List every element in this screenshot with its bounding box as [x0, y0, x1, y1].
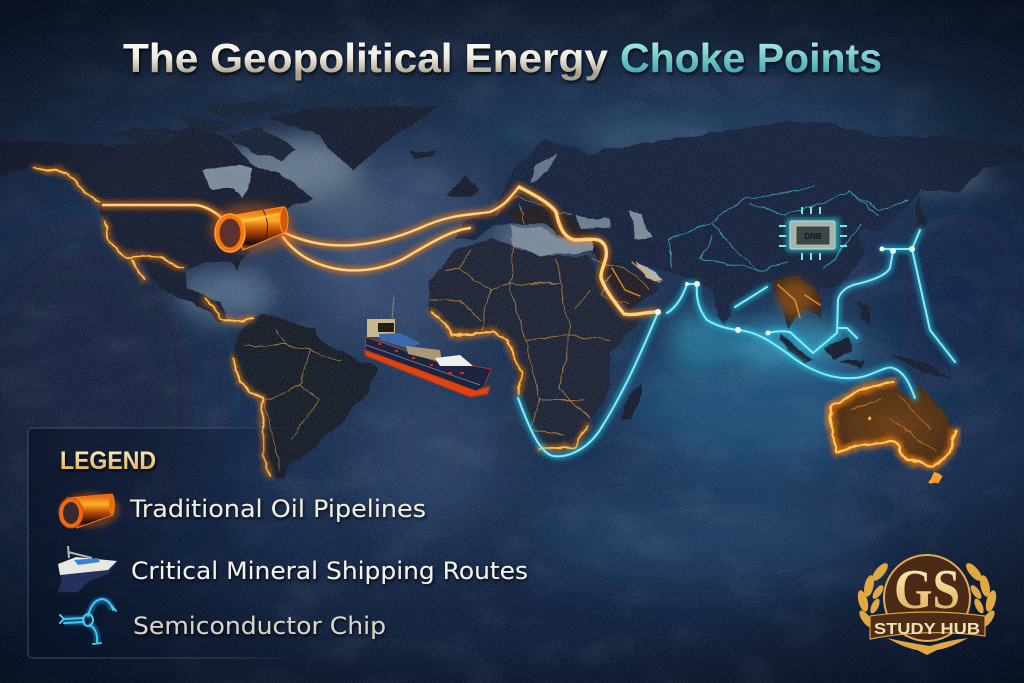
glowing coasts — [34, 168, 955, 484]
legend heading: LEGEND — [60, 447, 156, 475]
land: Madagascar — [621, 383, 642, 420]
glow: Americas coast — [34, 168, 270, 477]
route: upper Atlantic crossing — [283, 187, 519, 245]
glow: Australia coast — [830, 382, 955, 484]
land: Africa — [428, 238, 643, 450]
route nodes — [655, 246, 915, 336]
route: lower Atlantic crossing — [283, 228, 470, 270]
land: Australia — [830, 382, 955, 467]
land: Iceland and UK — [408, 151, 525, 197]
semiconductor shipping routes — [518, 230, 955, 456]
land: North America — [0, 128, 313, 322]
legend item: oil pipelines — [59, 492, 426, 528]
icon: chip on map — [779, 207, 847, 260]
legend item: shipping routes: Critical Mineral Shipping Routes — [131, 557, 528, 585]
title: The Geopolitical Energy — [123, 35, 608, 81]
icon: cargo ship on map — [364, 297, 491, 397]
logo: GS Study Hub badge: STUDY HUB — [874, 621, 980, 638]
land: South America — [233, 313, 377, 480]
land: Europe and Middle East tint — [500, 205, 655, 312]
route: Cape of Good Hope — [518, 315, 657, 456]
land: Arctic islands — [110, 102, 297, 160]
logo: GS Study Hub badge: GS — [894, 559, 960, 621]
legend item: semiconductor chip: Semiconductor Chip — [133, 612, 386, 640]
icon: chip on map: DNB — [804, 232, 822, 241]
panel: legend — [28, 428, 528, 658]
legend item: oil pipelines: Traditional Oil Pipelines — [129, 495, 426, 523]
title: Choke Points — [620, 35, 882, 81]
Asia cyan borders — [668, 185, 910, 270]
land: South-East Asia tint — [772, 276, 820, 325]
land: Europe and Asia — [454, 120, 1024, 330]
legend item: shipping routes — [58, 546, 528, 592]
route: South China Sea to Japan and Pacific — [735, 230, 955, 362]
oil pipeline routes — [103, 187, 657, 315]
land: Indonesia, Philippines, New Guinea and Japan — [778, 195, 952, 378]
country borders — [245, 195, 650, 470]
glow: Africa coast — [433, 313, 587, 449]
land: Greenland — [267, 107, 440, 170]
laurel wreath — [856, 561, 998, 655]
title — [123, 35, 882, 81]
glow: South-East Asia and Arabia lights — [612, 262, 820, 318]
legend item: semiconductor chip — [60, 599, 386, 644]
route: Europe to Gulf of Aden — [519, 187, 657, 315]
route: Indian Ocean to Australia — [667, 284, 915, 398]
icon: pipeline on map — [210, 204, 294, 252]
logo: GS Study Hub badge — [856, 555, 998, 655]
inland seas and frozen bays — [202, 152, 664, 280]
route: West coast to pipeline — [103, 205, 222, 218]
map: continents — [0, 102, 1024, 480]
